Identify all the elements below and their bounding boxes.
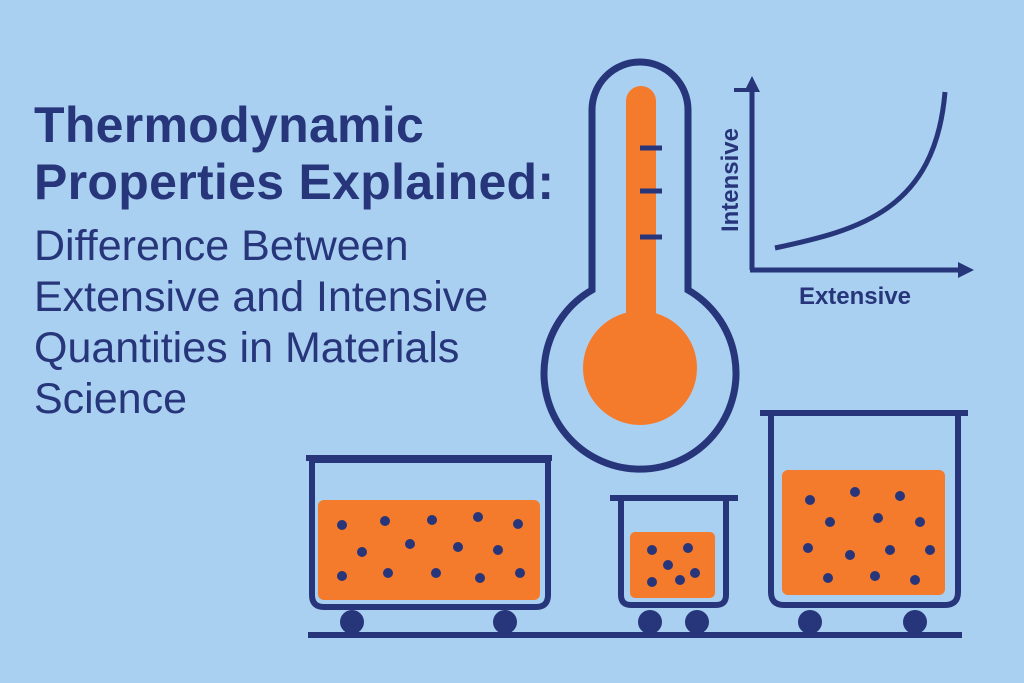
chart: intensive vs extensive: Extensive — [799, 283, 911, 310]
title: Thermodynamic — [34, 97, 424, 153]
title: Properties Explained: — [34, 154, 554, 210]
beaker: small — [610, 498, 738, 634]
title — [34, 97, 554, 210]
thermometer — [544, 62, 736, 469]
subtitle: Quantities in Materials — [34, 324, 459, 372]
beaker: large wide — [306, 458, 552, 634]
beaker: tall — [760, 413, 968, 634]
subtitle: Extensive and Intensive — [34, 273, 488, 321]
subtitle — [34, 222, 488, 423]
subtitle: Science — [34, 375, 187, 423]
subtitle: Difference Between — [34, 222, 408, 270]
chart: intensive vs extensive — [717, 76, 974, 310]
floor line — [308, 632, 962, 638]
chart: intensive vs extensive: Intensive — [717, 128, 744, 232]
